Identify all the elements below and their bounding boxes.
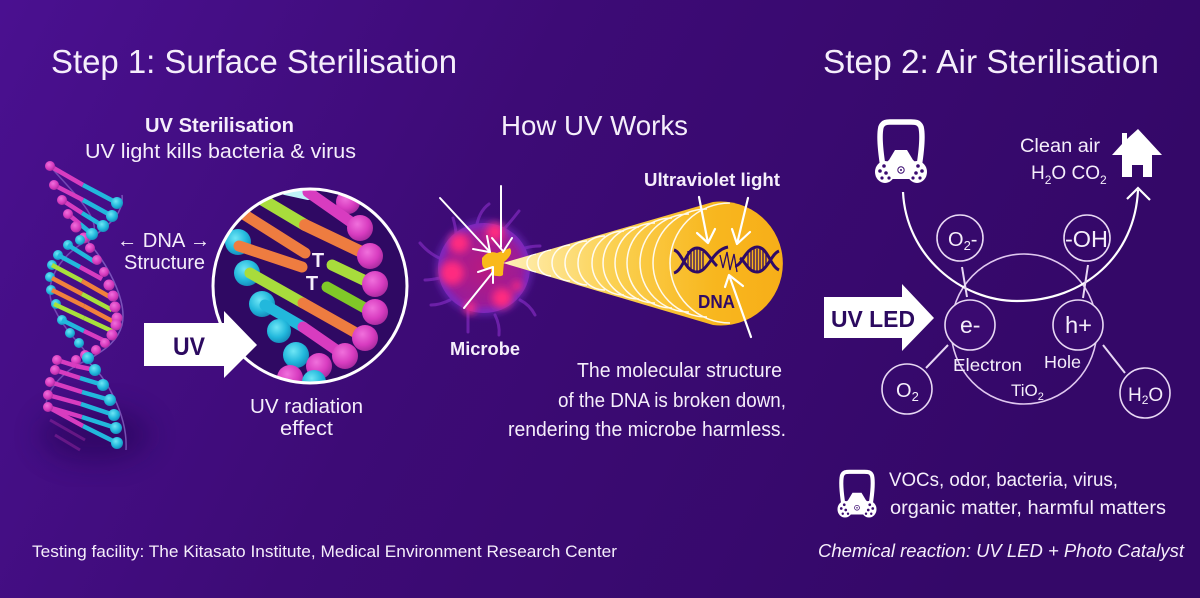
label: clean air — [1020, 136, 1107, 187]
icon: gas mask — [875, 122, 927, 183]
illustration: UV light cone — [503, 197, 783, 337]
reaction diagram — [882, 188, 1170, 418]
node: H2O — [1120, 368, 1170, 418]
heading: UV sterilisation: UV Sterilisation — [145, 115, 294, 137]
text: VOCs: VOCs, odor, bacteria, virus, — [889, 470, 1118, 491]
reaction labels: -OH — [1065, 226, 1108, 252]
reaction labels — [896, 226, 1163, 407]
label: clean air: Clean air — [1020, 136, 1101, 157]
text: molecular structure: of the DNA is broken down, — [558, 390, 786, 412]
arrow: UV — [144, 311, 257, 378]
illustration: UV light cone: DNA — [698, 292, 735, 312]
label: clean air: O CO — [1051, 163, 1100, 184]
reaction labels: Hole — [1044, 352, 1081, 372]
arrows: cone — [697, 197, 751, 337]
node: O2- — [937, 215, 983, 261]
top rungs — [50, 166, 117, 234]
text: chemical reaction: Chemical reaction: UV LED + Photo Catalyst — [818, 541, 1185, 561]
middle rungs — [45, 235, 85, 348]
node: O2 — [882, 364, 932, 414]
label: ultraviolet light: Ultraviolet light — [644, 170, 780, 190]
illustration: DNA helix — [40, 161, 150, 461]
connectors — [926, 265, 1125, 373]
illustration: microbe — [420, 204, 540, 335]
magnified DNA circle — [213, 189, 407, 394]
text: VOCs — [889, 470, 1166, 519]
reaction labels: 2 — [912, 389, 919, 404]
magnified DNA circle: T — [312, 250, 324, 272]
icon: house — [1112, 129, 1162, 177]
reaction labels: Electron — [953, 355, 1022, 375]
label: DNA structure: ← DNA → — [117, 230, 210, 252]
reaction labels: 2 — [1142, 393, 1149, 407]
reaction labels: O — [896, 380, 912, 402]
label: microbe: Microbe — [450, 339, 520, 359]
bottom rungs — [48, 360, 117, 443]
title: step 1: Step 1: Surface Sterilisation — [51, 43, 457, 80]
reaction labels: O — [1148, 385, 1163, 406]
heading: how UV works: How UV Works — [501, 110, 688, 141]
footer: testing facility: Testing facility: The Kitasato Institute, Medical Environment Research Center — [32, 542, 617, 561]
title: step 2: Step 2: Air Sterilisation — [823, 43, 1159, 80]
arrow: UV: UV — [173, 333, 205, 361]
text: molecular structure: The molecular structure — [577, 360, 782, 382]
icon: broken DNA — [674, 247, 779, 273]
icon: gas mask small — [838, 472, 876, 518]
label: UV radiation effect — [250, 396, 363, 440]
arrow: UV LED: UV LED — [831, 306, 915, 332]
reaction labels: O — [948, 229, 964, 251]
label: clean air: 2 — [1100, 173, 1107, 187]
text: molecular structure — [508, 360, 786, 441]
label: UV radiation effect: UV radiation — [250, 396, 363, 418]
node: -OH — [1064, 215, 1110, 261]
label: DNA structure: Structure — [124, 252, 205, 274]
label: UV radiation effect: effect — [280, 418, 333, 440]
text: VOCs: organic matter, harmful matters — [890, 498, 1166, 519]
text: molecular structure: rendering the microbe harmless. — [508, 419, 786, 441]
node: e- — [945, 300, 995, 350]
reaction labels: e- — [960, 312, 980, 338]
reaction labels: H — [1128, 385, 1142, 406]
reaction labels: h+ — [1065, 312, 1092, 338]
arrow: UV LED — [824, 284, 934, 351]
text: UV light kills: UV light kills bacteria & virus — [85, 141, 356, 163]
label: clean air: 2 — [1045, 173, 1052, 187]
label: DNA structure — [117, 230, 210, 274]
reaction labels: 2 — [1038, 391, 1044, 403]
reaction labels: TiO — [1011, 381, 1038, 400]
magnified DNA circle: T — [306, 273, 318, 295]
label: clean air: H — [1031, 163, 1045, 184]
reaction labels: 2 — [964, 238, 971, 253]
air flow arrow — [903, 188, 1150, 301]
arrows: UV hitting microbe — [440, 186, 512, 308]
node: h+ — [1053, 300, 1103, 350]
TiO2 circle — [951, 254, 1097, 404]
reaction labels: - — [971, 229, 977, 251]
